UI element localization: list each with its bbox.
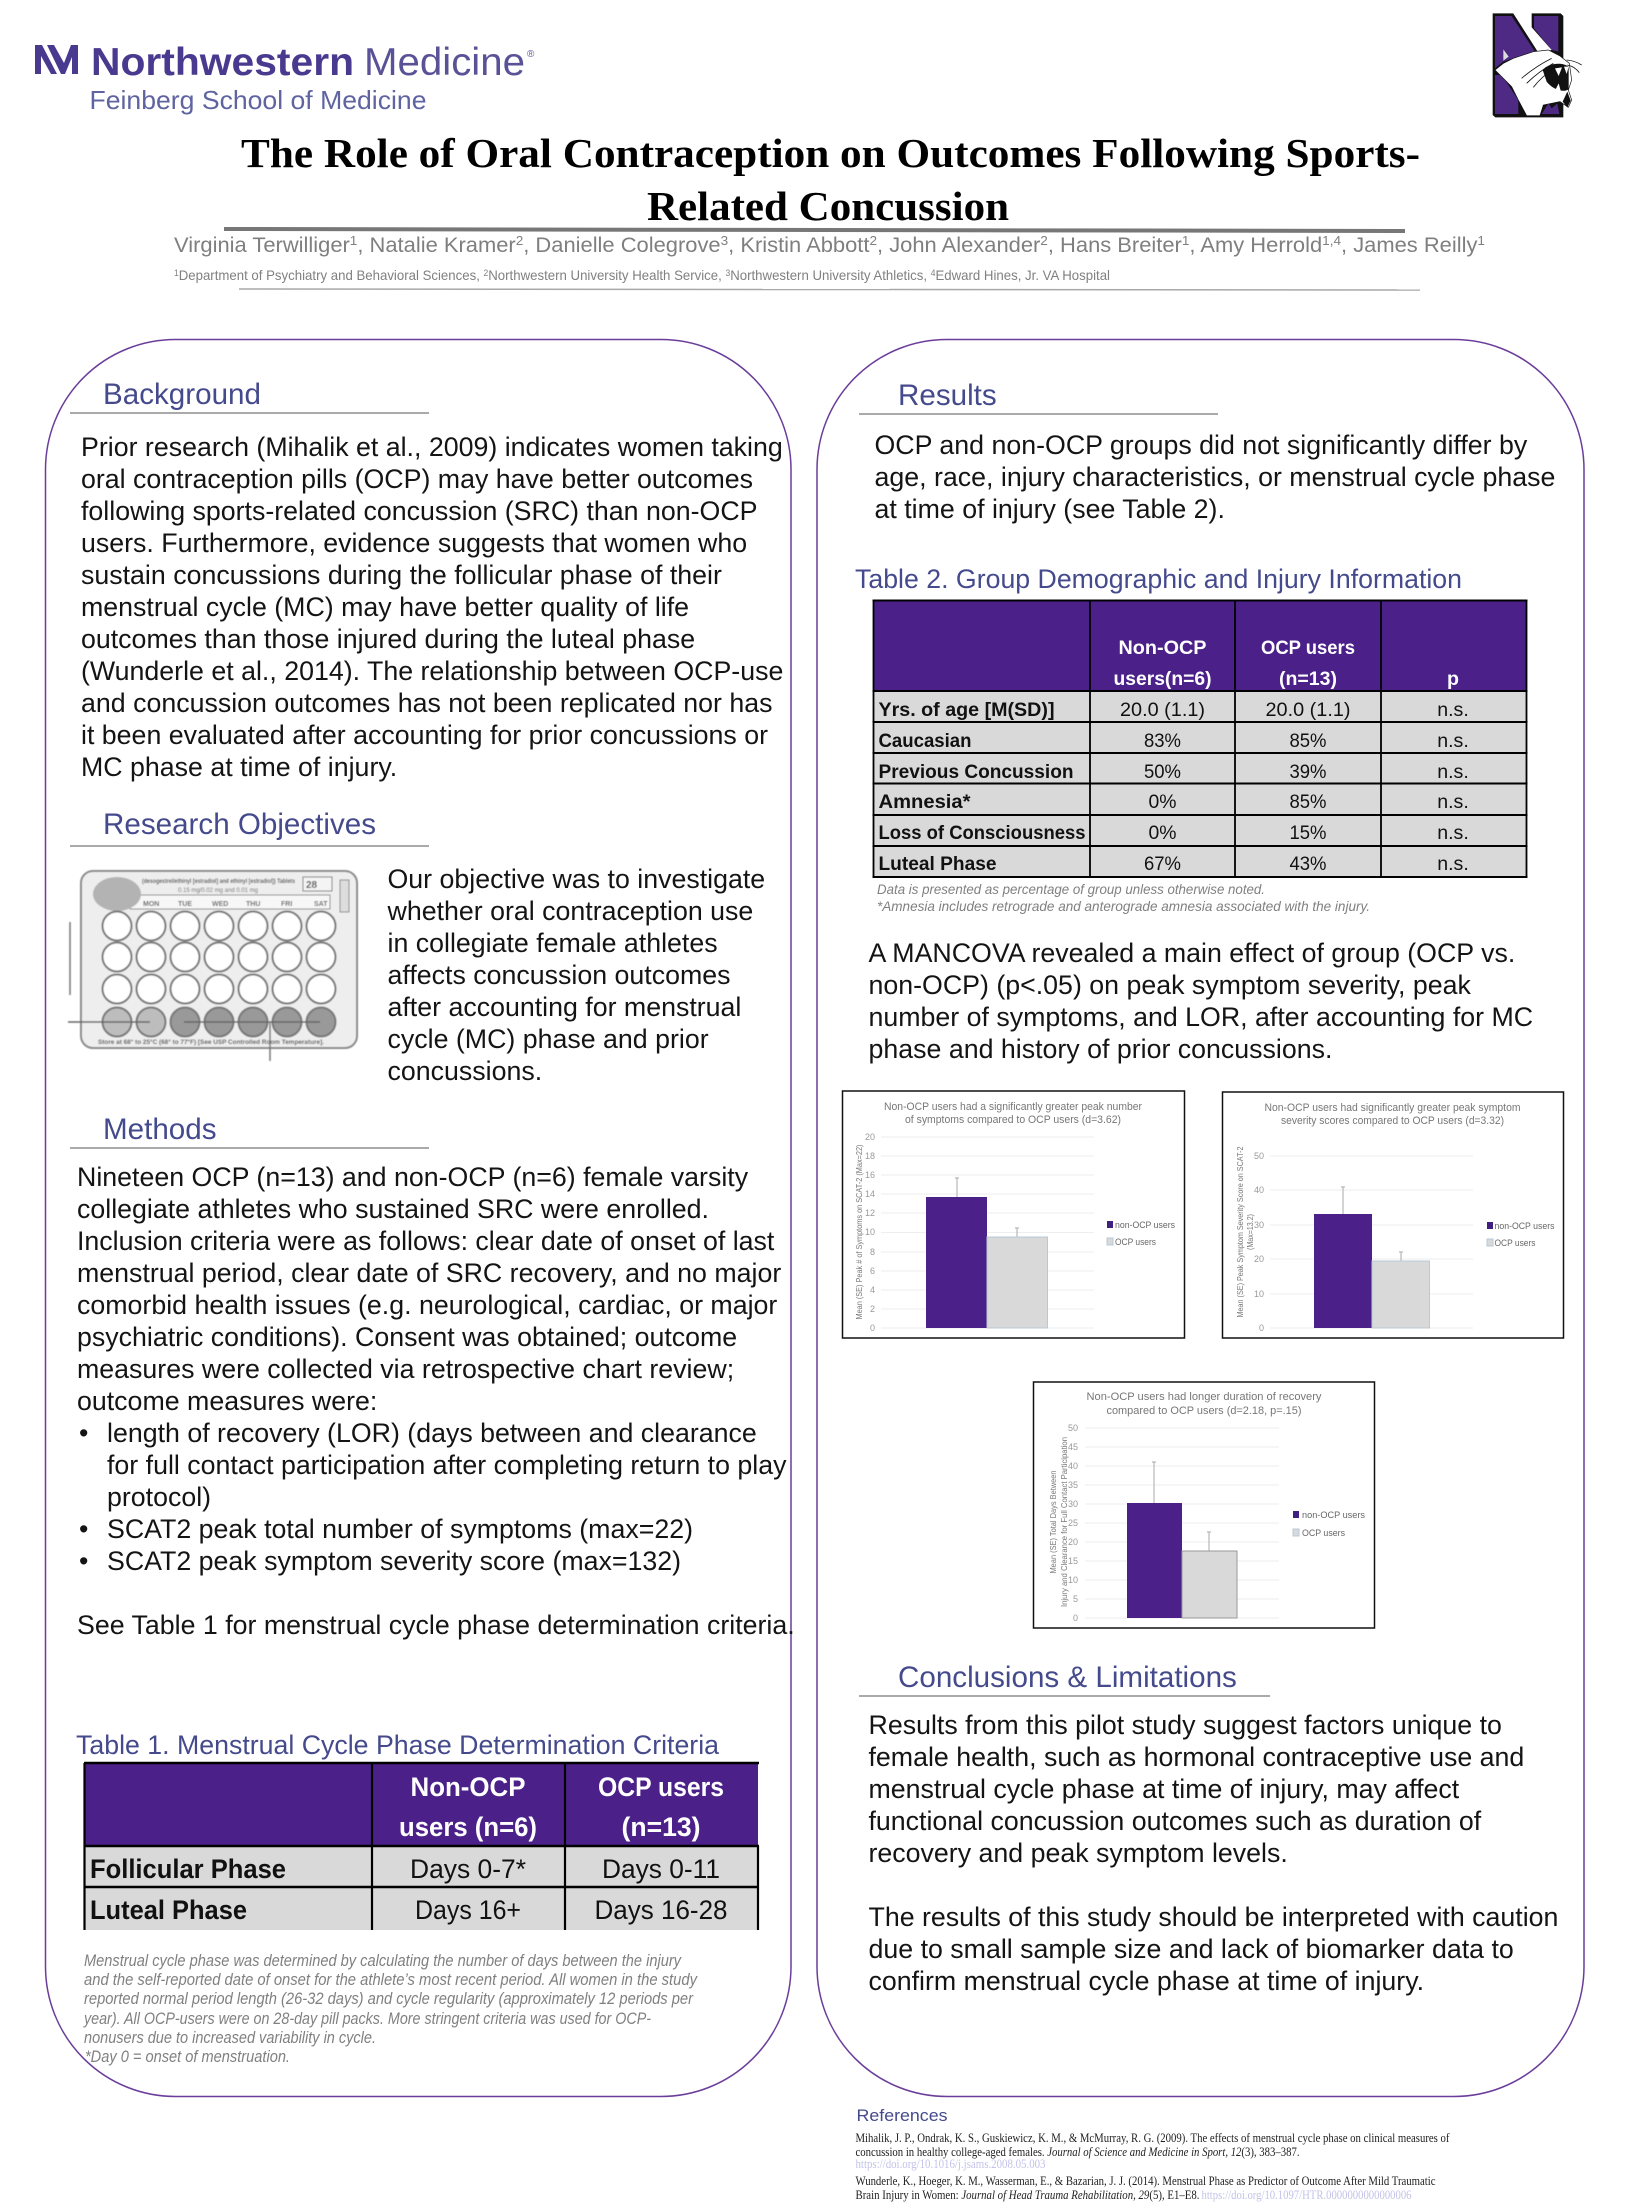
table 1 header labels: OCP users bbox=[598, 1772, 724, 1802]
y-axis labels: 35 bbox=[1068, 1480, 1078, 1490]
error bars bbox=[955, 1178, 1019, 1237]
reference: Mihalik: concussion in healthy college-aged females. Journal of Science and Medicine in Sport, 12(3), 383–387. bbox=[856, 2145, 1300, 2159]
conclusions text: female health, such as hormonal contraceptive use and bbox=[868, 1742, 1524, 1772]
weekday strip: WED bbox=[212, 901, 228, 908]
weekday strip bbox=[130, 895, 330, 909]
table 2 header labels: (n=13) bbox=[1279, 668, 1337, 690]
y-axis title: Injury and Clearance for Full Contact Participation bbox=[1060, 1437, 1069, 1607]
methods text: outcome measures were: bbox=[77, 1386, 377, 1416]
header bbox=[35, 13, 1582, 290]
legend: OCP users bbox=[1302, 1528, 1345, 1538]
methods text: SCAT2 peak total number of symptoms (max=22) bbox=[107, 1514, 693, 1544]
reference: Wunderle: Wunderle, K., Hoeger, K. M., Wasserman, E., & Bazarian, J. J. (2014). Menstrual Phase as Predictor of Outcome After Mild Traumatic bbox=[856, 2174, 1436, 2188]
side tab bbox=[340, 880, 349, 912]
table 2 p column: n.s. bbox=[1437, 791, 1469, 813]
y-axis title bbox=[1049, 1437, 1069, 1607]
table 2 header labels: users(n=6) bbox=[1114, 668, 1212, 690]
y-axis title bbox=[1236, 1146, 1255, 1318]
y-axis labels: 20 bbox=[1254, 1254, 1264, 1264]
table 2 row labels: Amnesia* bbox=[878, 791, 971, 813]
background text: MC phase at time of injury. bbox=[81, 752, 397, 782]
wildcat mane shadow bbox=[1563, 92, 1571, 107]
y-axis labels: 0 bbox=[870, 1323, 875, 1333]
table 2 non-OCP column: 67% bbox=[1144, 853, 1181, 875]
table 1 row: follicular: Follicular Phase bbox=[90, 1854, 286, 1884]
y-axis labels: 10 bbox=[865, 1227, 875, 1237]
school name: Feinberg School of Medicine bbox=[90, 85, 426, 115]
table 2 OCP column bbox=[1266, 699, 1350, 875]
authors: 1 bbox=[1182, 233, 1189, 248]
reference: Wunderle bbox=[856, 2174, 1436, 2202]
chart title: Non-OCP users had longer duration of recovery bbox=[1086, 1391, 1322, 1403]
bar: OCP users bbox=[1182, 1551, 1237, 1618]
chart title bbox=[884, 1101, 1142, 1126]
error bars bbox=[1341, 1187, 1403, 1261]
table 2 row labels: Caucasian bbox=[878, 730, 972, 752]
y-axis labels: 20 bbox=[1068, 1537, 1078, 1547]
bar chart: duration of recovery bbox=[1034, 1382, 1374, 1628]
purple collar bbox=[1542, 103, 1559, 114]
reference: Wunderle: https://doi.org/10.1097/HTR.0000000000000006 bbox=[1202, 2188, 1412, 2202]
table 1 row: follicular: Days 0-7* bbox=[410, 1854, 526, 1884]
authors: 1,4 bbox=[1322, 233, 1341, 248]
table 1 row: luteal: Luteal Phase bbox=[90, 1895, 247, 1925]
y-axis title: (Max=13.2) bbox=[1246, 1214, 1255, 1250]
reference: Mihalik bbox=[856, 2131, 1450, 2171]
methods text: • bbox=[79, 1546, 88, 1576]
chart title: of symptoms compared to OCP users (d=3.62) bbox=[905, 1114, 1121, 1126]
y-axis labels: 40 bbox=[1068, 1461, 1078, 1471]
conclusions text: menstrual cycle phase at time of injury, may affect bbox=[868, 1774, 1460, 1804]
day count box bbox=[303, 877, 332, 891]
y-axis labels: 15 bbox=[1068, 1556, 1078, 1566]
methods text: • bbox=[79, 1418, 88, 1448]
chart frame bbox=[842, 1091, 1184, 1338]
conclusions text: The results of this study should be interpreted with caution bbox=[868, 1902, 1558, 1932]
table 1 body rows bbox=[84, 1846, 758, 1930]
results text: at time of injury (see Table 2). bbox=[874, 494, 1225, 524]
methods text: SCAT2 peak symptom severity score (max=132) bbox=[107, 1546, 681, 1576]
error bars bbox=[1152, 1462, 1211, 1551]
chart title bbox=[1086, 1391, 1322, 1417]
authors: , James Reilly bbox=[1341, 234, 1478, 257]
objectives text: cycle (MC) phase and prior bbox=[388, 1024, 709, 1054]
table 2 non-OCP column: 50% bbox=[1144, 761, 1181, 783]
conclusions text: due to small sample size and lack of biomarker data to bbox=[868, 1934, 1514, 1964]
pill pack label: (desogestrel/ethinyl [estradiol] and ethinyl [estradiol]) Tablets bbox=[142, 878, 295, 885]
panel border bbox=[46, 340, 791, 2096]
logo wordmark: Medicine: Medicine bbox=[364, 41, 525, 84]
chart title: Non-OCP users had significantly greater peak symptom bbox=[1264, 1102, 1520, 1114]
table 2 non-OCP column: 83% bbox=[1144, 730, 1181, 752]
y-axis labels: 20 bbox=[865, 1132, 875, 1142]
table 1 row: follicular: Days 0-11 bbox=[602, 1854, 720, 1884]
weekday strip: THU bbox=[246, 901, 260, 908]
conclusions text: Results from this pilot study suggest factors unique to bbox=[868, 1710, 1502, 1740]
results text: age, race, injury characteristics, or menstrual cycle phase bbox=[874, 462, 1555, 492]
table 2 OCP column: 85% bbox=[1290, 730, 1326, 752]
chart title: compared to OCP users (d=2.18, p=.15) bbox=[1106, 1405, 1302, 1417]
authors: , Natalie Kramer bbox=[357, 234, 516, 257]
table 2 bbox=[872, 600, 1528, 877]
methods text: for full contact participation after completing return to play bbox=[107, 1450, 787, 1480]
table 1 note: reported normal period length (26-32 days) and cycle regularity (approximately 12 periods per bbox=[84, 1990, 694, 2008]
methods text: See Table 1 for menstrual cycle phase determination criteria. bbox=[77, 1610, 795, 1640]
results text: OCP and non-OCP groups did not significantly differ by bbox=[874, 430, 1528, 460]
background text: Prior research (Mihalik et al., 2009) indicates women taking bbox=[81, 432, 783, 462]
authors: , Danielle Colegrove bbox=[523, 234, 721, 257]
background text: (Wunderle et al., 2014). The relationship between OCP-use bbox=[81, 656, 783, 686]
y-axis labels bbox=[1068, 1423, 1078, 1623]
table 1 note bbox=[83, 1952, 699, 2066]
y-axis labels bbox=[865, 1132, 875, 1333]
table 1 row: luteal: Days 16-28 bbox=[594, 1895, 728, 1925]
table 2 p column: n.s. bbox=[1437, 822, 1469, 844]
authors: 2 bbox=[1040, 233, 1048, 248]
conclusions text: confirm menstrual cycle phase at time of injury. bbox=[868, 1966, 1424, 1996]
MANCOVA text: A MANCOVA revealed a main effect of group (OCP vs. bbox=[868, 938, 1515, 968]
objectives text: Our objective was to investigate bbox=[388, 864, 765, 894]
objectives text: concussions. bbox=[388, 1056, 542, 1086]
table 1 row: luteal: Days 16+ bbox=[415, 1895, 521, 1925]
table 2 p column: n.s. bbox=[1437, 730, 1469, 752]
table 1 note: and the self-reported date of onset for the athlete’s most recent period. All women in the study bbox=[84, 1971, 699, 1989]
authors: 2 bbox=[516, 233, 523, 248]
table 2 header labels: OCP users bbox=[1261, 637, 1355, 659]
bar: OCP users bbox=[987, 1237, 1048, 1328]
affiliations: Northwestern University Health Service, bbox=[488, 267, 725, 283]
panel border bbox=[817, 340, 1584, 2096]
table 2 note: *Amnesia includes retrograde and anterograde amnesia associated with the injury. bbox=[877, 898, 1370, 914]
y-axis labels: 0 bbox=[1259, 1323, 1264, 1333]
table 2 non-OCP column: 0% bbox=[1148, 791, 1176, 813]
table 2 header labels bbox=[1114, 637, 1459, 690]
table 2 p column: n.s. bbox=[1437, 699, 1469, 721]
methods text: comorbid health issues (e.g. neurological, cardiac, or major bbox=[77, 1290, 777, 1320]
background text: it been evaluated after accounting for prior concussions or bbox=[81, 720, 768, 750]
y-axis labels: 50 bbox=[1068, 1423, 1078, 1433]
legend bbox=[1107, 1220, 1175, 1247]
background text: oral contraception pills (OCP) may have better outcomes bbox=[81, 464, 753, 494]
authors: , Hans Breiter bbox=[1048, 234, 1182, 257]
legend: non-OCP users bbox=[1494, 1221, 1555, 1231]
methods text: protocol) bbox=[107, 1482, 211, 1512]
table 2 p column: n.s. bbox=[1437, 761, 1469, 783]
y-axis labels: 50 bbox=[1254, 1151, 1264, 1161]
background text: users. Furthermore, evidence suggests that women who bbox=[81, 528, 747, 558]
logo blot bbox=[93, 877, 141, 911]
heading: background: Background bbox=[103, 378, 261, 411]
active pills bbox=[102, 912, 336, 1004]
table 1 heading: Table 1. Menstrual Cycle Phase Determination Criteria bbox=[76, 1730, 720, 1760]
Northwestern wildcat N logo bbox=[1493, 13, 1582, 117]
table 2 OCP column: 43% bbox=[1290, 853, 1326, 875]
letter N base bbox=[1493, 13, 1563, 117]
legend: non-OCP users bbox=[1115, 1220, 1175, 1230]
weekday strip: SAT bbox=[314, 901, 328, 908]
chart frame bbox=[1034, 1382, 1374, 1628]
table 2 row labels: Luteal Phase bbox=[878, 853, 997, 875]
wildcat teeth bbox=[1555, 67, 1569, 91]
authors: 3 bbox=[721, 233, 728, 248]
table 1 note: year). All OCP-users were on 28-day pill packs. More stringent criteria was used for OCP- bbox=[83, 2010, 651, 2028]
table 1 row: luteal bbox=[90, 1895, 728, 1925]
y-axis labels: 40 bbox=[1254, 1185, 1264, 1195]
affiliations: 2 bbox=[484, 268, 488, 278]
authors: , Amy Herrold bbox=[1189, 234, 1322, 257]
table 2 note: Data is presented as percentage of group unless otherwise noted. bbox=[877, 881, 1265, 897]
table 2 p column: n.s. bbox=[1437, 853, 1469, 875]
legend: OCP users bbox=[1494, 1238, 1536, 1248]
MANCOVA text: phase and history of prior concussions. bbox=[868, 1034, 1332, 1064]
authors: 1 bbox=[350, 233, 357, 248]
chart title bbox=[1264, 1102, 1520, 1127]
wildcat whiskers bbox=[1522, 58, 1582, 87]
N left stem bbox=[1495, 16, 1535, 68]
table 1 row: follicular bbox=[90, 1854, 720, 1884]
affiliations: 3 bbox=[725, 268, 730, 278]
authors: , Kristin Abbott bbox=[728, 234, 870, 257]
title: The Role of Oral Contraception on Outcomes Following Sports- bbox=[241, 130, 1420, 176]
y-axis title: Mean (SE) Peak Symptom Severity Score on SCAT-2 bbox=[1236, 1146, 1245, 1318]
methods text: measures were collected via retrospective chart review; bbox=[77, 1354, 734, 1384]
table 2 row labels: Loss of Consciousness bbox=[878, 822, 1086, 844]
objectives text: after accounting for menstrual bbox=[388, 992, 741, 1022]
logo mark bbox=[35, 45, 78, 74]
wildcat mouth bbox=[1543, 64, 1569, 91]
y-axis labels: 45 bbox=[1068, 1442, 1078, 1452]
affiliations: Department of Psychiatry and Behavioral Sciences, bbox=[179, 267, 484, 283]
authors: 2 bbox=[869, 233, 877, 248]
y-axis labels: 5 bbox=[1073, 1594, 1078, 1604]
weekday strip: FRI bbox=[281, 901, 292, 908]
heading: research objectives: Research Objectives bbox=[103, 808, 376, 841]
table 1 note: nonusers due to increased variability in cycle. bbox=[84, 2029, 376, 2047]
background text: menstrual cycle (MC) may have better quality of life bbox=[81, 592, 689, 622]
heading: conclusions and limitations: Conclusions & Limitations bbox=[898, 1661, 1237, 1694]
table 2 header labels: Non-OCP bbox=[1118, 637, 1206, 659]
y-axis labels: 6 bbox=[870, 1266, 875, 1276]
table 2 body rows bbox=[874, 691, 1526, 877]
y-axis labels bbox=[1254, 1151, 1264, 1333]
pill card bbox=[81, 871, 357, 1048]
logo wordmark: Northwestern: Northwestern bbox=[91, 41, 354, 84]
table 2 note bbox=[877, 881, 1370, 914]
table 1 header labels: Non-OCP bbox=[410, 1772, 526, 1802]
y-axis labels: 25 bbox=[1068, 1518, 1078, 1528]
methods text: Inclusion criteria were as follows: clear date of onset of last bbox=[77, 1226, 775, 1256]
reference: Mihalik: https://doi.org/10.1016/j.jsams.2008.05.003 bbox=[856, 2157, 1046, 2171]
chart title: Non-OCP users had a significantly greater peak number bbox=[884, 1101, 1142, 1113]
table 2 row labels: Previous Concussion bbox=[878, 761, 1074, 783]
table 2 non-OCP column bbox=[1120, 699, 1205, 875]
right panel bbox=[817, 340, 1584, 2096]
table 2 row labels: Yrs. of age [M(SD)] bbox=[878, 699, 1054, 721]
table 2 OCP column: 20.0 (1.1) bbox=[1266, 699, 1350, 721]
references bbox=[856, 2106, 1450, 2202]
y-axis labels: 14 bbox=[865, 1189, 875, 1199]
affiliations: 4 bbox=[931, 268, 935, 278]
objectives text: whether oral contraception use bbox=[386, 896, 753, 926]
table 1 header labels bbox=[399, 1772, 724, 1842]
y-axis labels: 8 bbox=[870, 1247, 875, 1257]
affiliations: Northwestern University Athletics, bbox=[730, 267, 931, 283]
title: Related Concussion bbox=[647, 183, 1009, 229]
y-axis labels: 2 bbox=[870, 1304, 875, 1314]
table 1 header row bbox=[84, 1763, 758, 1846]
table 2 p column bbox=[1437, 699, 1469, 875]
bar chart: peak symptom severity bbox=[1222, 1092, 1564, 1338]
methods text: collegiate athletes who sustained SRC were enrolled. bbox=[77, 1194, 709, 1224]
y-axis labels: 30 bbox=[1254, 1220, 1264, 1230]
background text: and concussion outcomes has not been replicated nor has bbox=[81, 688, 772, 718]
heading: results: Results bbox=[898, 379, 997, 412]
N lower stem bbox=[1495, 75, 1518, 114]
wildcat head bbox=[1495, 50, 1572, 116]
bar chart: peak number of symptoms bbox=[842, 1091, 1184, 1338]
MANCOVA text: number of symptoms, and LOR, after accounting for MC bbox=[868, 1002, 1533, 1032]
y-axis labels: 12 bbox=[865, 1208, 875, 1218]
table 2 OCP column: 85% bbox=[1290, 791, 1326, 813]
table 1 header labels: users (n=6) bbox=[399, 1812, 537, 1842]
reference: Wunderle: Brain Injury in Women: Journal of Head Trauma Rehabilitation, 29(5), E1–E8. bbox=[856, 2188, 1199, 2202]
table 2 header row bbox=[874, 600, 1526, 691]
table 2 OCP column: 39% bbox=[1290, 761, 1326, 783]
weekday strip: TUE bbox=[178, 901, 192, 908]
legend bbox=[1293, 1510, 1365, 1538]
chart frame bbox=[1222, 1092, 1564, 1338]
title bbox=[241, 130, 1420, 229]
y-axis labels: 10 bbox=[1254, 1289, 1264, 1299]
pill pack footer: Store at 68° to 25°C (68° to 77°F) [See USP Controlled Room Temperature]. bbox=[98, 1038, 324, 1046]
bar: non-OCP users bbox=[1314, 1214, 1372, 1328]
table 1 bbox=[84, 1763, 759, 1930]
bar: OCP users bbox=[1372, 1261, 1430, 1328]
methods text: menstrual period, clear date of SRC recovery, and no major bbox=[77, 1258, 781, 1288]
pill pack dose: 0.15 mg/0.02 mg and 0.01 mg bbox=[178, 888, 258, 894]
y-axis labels: 30 bbox=[1068, 1499, 1078, 1509]
icon: pill pack bbox=[68, 871, 357, 1061]
authors: 1 bbox=[1477, 233, 1485, 248]
table 2 non-OCP column: 20.0 (1.1) bbox=[1120, 699, 1205, 721]
conclusions text: functional concussion outcomes such as duration of bbox=[868, 1806, 1482, 1836]
table 1 note: Menstrual cycle phase was determined by calculating the number of days between the injury bbox=[84, 1952, 683, 1970]
table 2 header labels: p bbox=[1447, 668, 1459, 690]
affiliations: 1 bbox=[174, 268, 179, 278]
Northwestern Medicine logo bbox=[35, 41, 535, 115]
objectives text: in collegiate female athletes bbox=[388, 928, 718, 958]
objectives text: affects concussion outcomes bbox=[388, 960, 730, 990]
conclusions text: recovery and peak symptom levels. bbox=[868, 1838, 1288, 1868]
day count box: 28 bbox=[306, 880, 318, 891]
table 2 row labels bbox=[878, 699, 1086, 875]
registered mark: ® bbox=[527, 49, 535, 60]
background text: outcomes than those injured during the luteal phase bbox=[81, 624, 695, 654]
legend: non-OCP users bbox=[1302, 1510, 1365, 1520]
diagonal white strip bbox=[1513, 13, 1552, 53]
table 2 heading: Table 2. Group Demographic and Injury Information bbox=[855, 564, 1462, 594]
chart title: severity scores compared to OCP users (d=3.32) bbox=[1281, 1115, 1504, 1127]
methods text: • bbox=[79, 1514, 88, 1544]
y-axis title: Mean (SE) Peak # of Symptoms on SCAT-2 (Max=22) bbox=[855, 1144, 864, 1320]
background text: following sports-related concussion (SRC) than non-OCP bbox=[81, 496, 757, 526]
methods text: psychiatric conditions). Consent was obtained; outcome bbox=[77, 1322, 737, 1352]
methods text: Nineteen OCP (n=13) and non-OCP (n=6) female varsity bbox=[77, 1162, 749, 1192]
bar: non-OCP users bbox=[926, 1197, 987, 1328]
weekday strip: MON bbox=[143, 901, 159, 908]
table 2 OCP column: 15% bbox=[1290, 822, 1326, 844]
y-axis labels: 0 bbox=[1073, 1613, 1078, 1623]
reminder pills bbox=[102, 1008, 336, 1036]
y-axis title: Mean (SE) Total Days Between bbox=[1049, 1470, 1058, 1574]
authors: , John Alexander bbox=[877, 234, 1040, 257]
MANCOVA text: non-OCP) (p<.05) on peak symptom severity, peak bbox=[868, 970, 1472, 1000]
table 2 non-OCP column: 0% bbox=[1148, 822, 1176, 844]
legend bbox=[1487, 1221, 1555, 1248]
y-axis labels: 10 bbox=[1068, 1575, 1078, 1585]
left panel bbox=[46, 340, 795, 2096]
references heading: References bbox=[856, 2106, 948, 2125]
y-axis labels: 16 bbox=[865, 1170, 875, 1180]
bar: non-OCP users bbox=[1127, 1503, 1182, 1618]
background text: sustain concussions during the follicular phase of their bbox=[81, 560, 722, 590]
y-axis labels: 4 bbox=[870, 1285, 875, 1295]
table 1 header labels: (n=13) bbox=[622, 1812, 700, 1842]
heading: methods: Methods bbox=[103, 1113, 217, 1146]
notch bbox=[1503, 49, 1509, 61]
legend: OCP users bbox=[1115, 1237, 1156, 1247]
y-axis labels: 18 bbox=[865, 1151, 875, 1161]
reference: Mihalik: Mihalik, J. P., Ondrak, K. S., Guskiewicz, K. M., & McMurray, R. G. (2009). The effects of menstrual cycle phase on clinical measures of bbox=[856, 2131, 1450, 2145]
authors: Virginia Terwilliger bbox=[174, 234, 342, 257]
affiliations: Edward Hines, Jr. VA Hospital bbox=[935, 267, 1110, 283]
methods text: length of recovery (LOR) (days between and clearance bbox=[107, 1418, 757, 1448]
N right stem bbox=[1534, 16, 1558, 52]
table 1 note: *Day 0 = onset of menstruation. bbox=[85, 2048, 290, 2066]
